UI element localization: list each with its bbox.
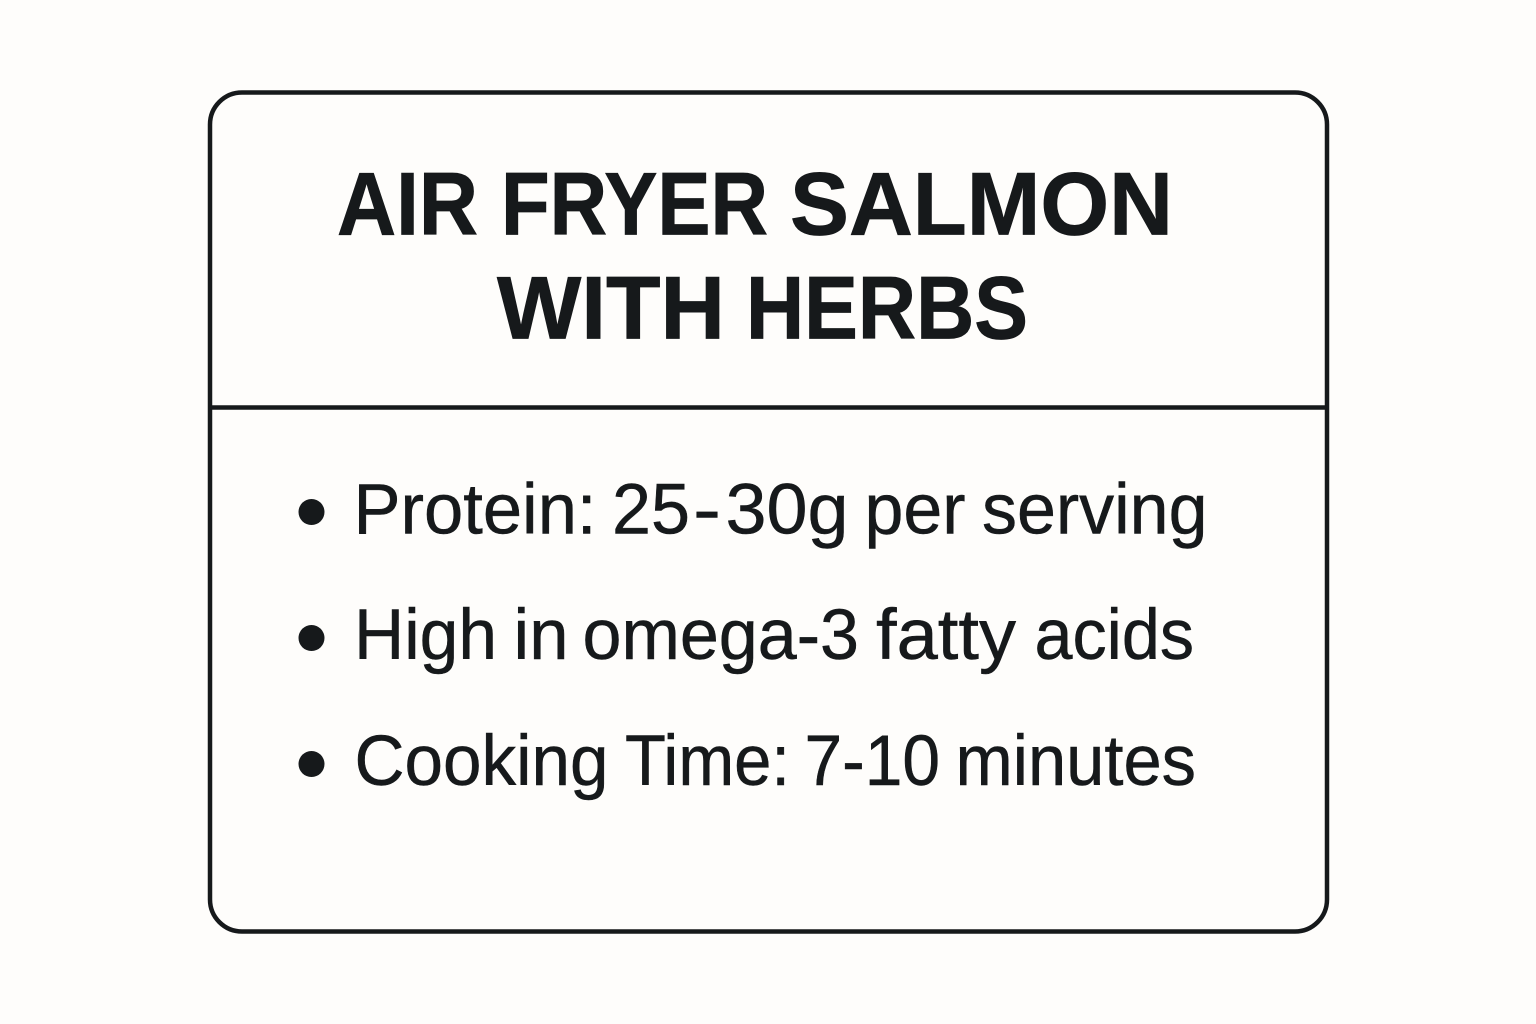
bullet: protein: -	[693, 470, 721, 550]
panel: card outline	[210, 92, 1327, 932]
title: AIR	[337, 154, 478, 254]
bullet: cooking time: Cooking	[354, 722, 608, 801]
bullet: omega-3: High	[354, 596, 497, 675]
bullet: omega-3: fatty	[876, 596, 1017, 675]
title: SALMON	[790, 154, 1173, 254]
bullet: protein: 30g	[726, 470, 848, 550]
bullet: omega-3: omega-3	[582, 596, 859, 675]
bullet: omega-3	[298, 596, 1194, 675]
bullet: cooking time: 7-10	[804, 722, 940, 801]
bullet: cooking time: minutes	[956, 722, 1196, 801]
list: nutrition and cooking facts	[298, 470, 1208, 801]
title: FRYER	[501, 154, 768, 254]
title: WITH	[497, 258, 725, 358]
bullet: protein	[298, 470, 1208, 550]
title	[337, 154, 1173, 358]
bullet: protein: serving	[982, 470, 1208, 550]
bullet: protein: Protein:	[354, 470, 596, 550]
bullet: cooking time	[298, 722, 1196, 801]
bullet: omega-3: acids	[1034, 596, 1194, 675]
bullet: protein: 25	[612, 470, 690, 550]
title: HERBS	[746, 258, 1028, 358]
bullet: omega-3: in	[514, 596, 568, 675]
bullet: protein: per	[864, 470, 966, 550]
bullet: cooking time: Time:	[625, 722, 790, 801]
